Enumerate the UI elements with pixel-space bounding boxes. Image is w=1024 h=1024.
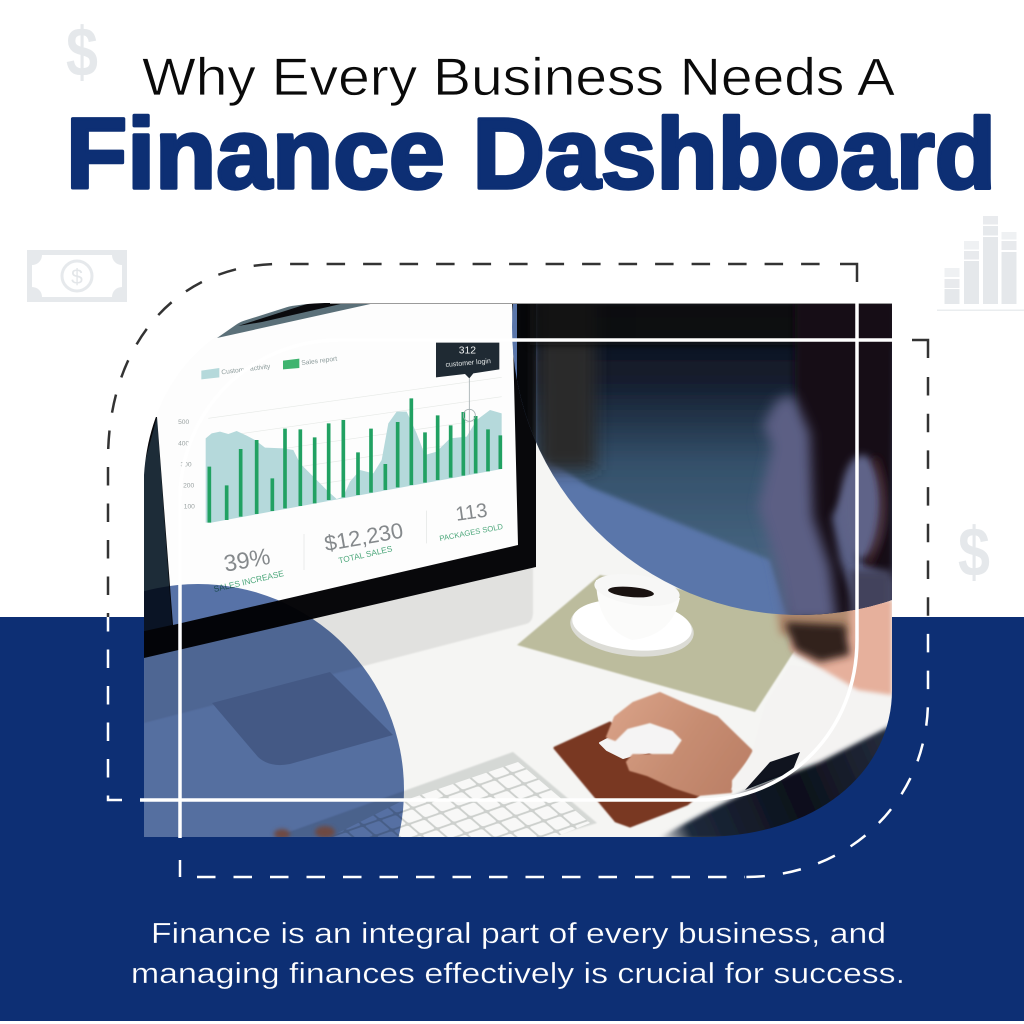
monitor bezel	[144, 417, 536, 658]
axis labels: 300	[180, 462, 192, 469]
monitor stand	[144, 555, 533, 723]
axis labels: 500	[178, 419, 190, 426]
mouse	[599, 732, 651, 759]
caption	[131, 918, 905, 990]
dashboard screen	[130, 300, 518, 625]
icon: dollar sign top left: $	[66, 13, 98, 91]
dark room column	[538, 295, 596, 470]
upper bezel	[512, 304, 526, 417]
upper right circle overlay with blurred background and man's head	[512, 304, 892, 615]
frame: back frame top right corner	[840, 264, 857, 282]
hair mass	[795, 300, 895, 630]
frame: front frame solid white	[180, 340, 892, 838]
stat: packages sold: 113	[454, 500, 489, 526]
axis labels	[178, 419, 195, 510]
frame: front frame bottom dashes	[197, 876, 745, 878]
bar series: sales report	[209, 398, 500, 523]
hand on mouse	[607, 693, 753, 795]
stat: sales increase: SALES INCREASE	[213, 568, 285, 594]
ear	[840, 455, 884, 559]
lower head shade	[850, 570, 892, 625]
coffee cup and saucer	[570, 576, 694, 657]
icon: stacked bar chart	[937, 216, 1024, 311]
beard	[785, 622, 850, 662]
skin shade above beard	[774, 610, 854, 638]
stat: sales increase	[214, 548, 284, 592]
axis labels: 100	[184, 503, 195, 510]
left bezel highlight	[144, 418, 172, 631]
suit	[655, 725, 892, 840]
axis labels: 200	[183, 482, 195, 489]
upper bezel wedge	[217, 303, 375, 338]
frame: back frame solid white	[140, 303, 857, 800]
caption: managing finances effectively is crucial for success.	[131, 958, 905, 990]
icon: banknote	[27, 250, 127, 302]
man's neck skin	[790, 600, 892, 695]
frame: front frame right dashes white	[745, 377, 928, 877]
man's sleeve	[745, 752, 800, 790]
blurred room backdrop	[536, 303, 892, 625]
tooltip: 312 customer login	[436, 343, 499, 378]
placemat	[517, 575, 800, 712]
legend: Sales report	[301, 356, 338, 367]
knuckles under overlay	[274, 826, 335, 839]
desk surface	[362, 443, 892, 837]
title line two: Finance Dashboard	[66, 98, 996, 210]
mouse pad	[555, 723, 698, 826]
chart marker line	[463, 378, 475, 474]
stat: packages sold	[440, 503, 502, 541]
caption: Finance is an integral part of every business, and	[151, 918, 886, 950]
frame: back frame dashes white	[108, 264, 826, 800]
stat: total sales: $12,230	[322, 518, 405, 556]
tooltip: 312 customer login: customer login	[445, 358, 491, 369]
icon: banknote: $	[71, 266, 83, 289]
frame: front frame top right corner	[912, 340, 928, 358]
chart on screen	[178, 343, 504, 594]
stat: packages sold: PACKAGES SOLD	[439, 522, 504, 543]
axis labels: 400	[178, 441, 190, 448]
navy lower band	[0, 617, 1024, 1021]
stat dividers	[304, 511, 427, 570]
legend: Custom · activity	[221, 363, 271, 376]
frame: front frame bottom left stub	[179, 860, 181, 877]
dark top strip	[530, 295, 900, 345]
keyboard	[275, 752, 597, 837]
frame: front frame right dashes dark	[745, 377, 928, 877]
upper black wedge	[238, 303, 345, 326]
face	[758, 395, 837, 622]
cheek	[832, 470, 892, 610]
panel: desk photo with dashboard monitor	[144, 303, 892, 837]
man's shirt and cuff	[730, 749, 755, 790]
stat: total sales: TOTAL SALES	[337, 543, 394, 565]
top photo edge	[330, 303, 892, 304]
area series: customer activity	[206, 410, 502, 523]
legend	[201, 356, 338, 379]
ear shadow	[868, 458, 884, 565]
frame: back frame dashes dark	[108, 264, 826, 800]
stand base	[212, 672, 393, 765]
lower left circle overlay	[144, 584, 404, 837]
stat: total sales	[324, 523, 402, 563]
tooltip: 312 customer login: 312	[459, 345, 476, 356]
chart grid lines	[208, 377, 502, 484]
icon: dollar sign right: $	[958, 513, 990, 591]
stat: sales increase: 39%	[222, 543, 272, 577]
monitor bezel in overlay	[517, 304, 536, 442]
title line one: Why Every Business Needs A	[142, 48, 896, 107]
